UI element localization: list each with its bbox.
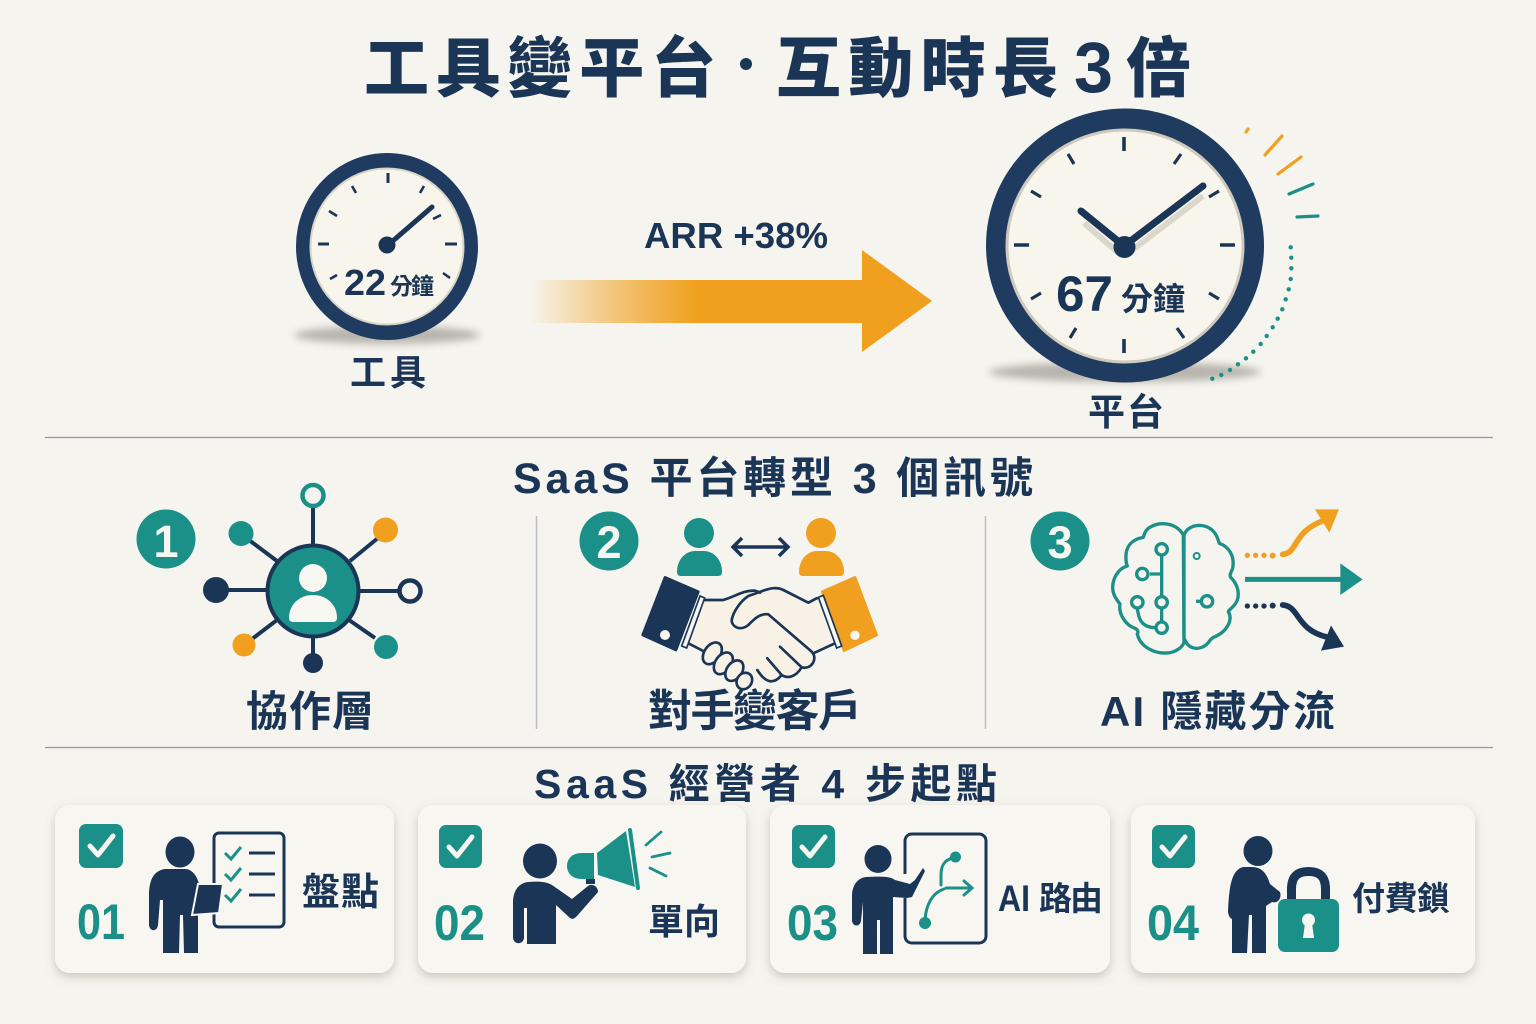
number 03: 03 <box>787 895 838 951</box>
icon: network hub <box>203 485 420 673</box>
arrow: growth <box>530 250 932 352</box>
icon: checklist <box>214 833 284 927</box>
icon: person <box>1228 836 1281 953</box>
icon: brain circuit <box>1113 524 1238 653</box>
heading: signals: SaaS 平台轉型 3 個訊號 <box>513 455 1033 503</box>
panel: signal 1 collaboration layer <box>136 485 420 735</box>
value: 22 minutes: 分鐘 <box>390 273 434 299</box>
value: 67 minutes <box>1056 266 1185 322</box>
badge 2 <box>580 512 638 570</box>
badge 2: 2 <box>596 517 622 568</box>
clock: tool 22 minutes <box>294 153 480 344</box>
number 02: 02 <box>434 895 485 951</box>
label: AI routing <box>998 878 1103 919</box>
label: paywall: 付費鎖 <box>1352 880 1450 917</box>
label: tool: 工具 <box>350 352 426 393</box>
card: step 02 one-way <box>418 805 746 973</box>
badge 1: 1 <box>153 516 179 567</box>
card: step 04 paywall <box>1131 805 1475 973</box>
label: rival becomes customer: 對手變客戶 <box>648 687 862 736</box>
checkbox <box>792 825 835 868</box>
icon: person pointing <box>852 845 925 954</box>
icon: handshake <box>643 577 877 692</box>
label: collaboration layer: 協作層 <box>246 688 374 735</box>
number 04: 04 <box>1147 895 1199 951</box>
icon: routing board <box>905 834 986 943</box>
title: 互動時長 <box>776 32 1058 105</box>
checkbox <box>1152 825 1195 868</box>
icon: padlock <box>1278 872 1339 952</box>
checkbox <box>79 824 123 868</box>
checkbox <box>439 825 482 868</box>
label: one-way: 單向 <box>648 901 720 942</box>
label: inventory: 盤點 <box>302 872 379 914</box>
badge 3 <box>1030 512 1090 570</box>
number 01: 01 <box>77 894 125 950</box>
badge 3: 3 <box>1047 517 1073 568</box>
heading: four steps: SaaS 經營者 4 步起點 <box>534 761 997 807</box>
title <box>364 29 1191 108</box>
growth label: ARR +38% <box>644 215 828 256</box>
value: 22 minutes <box>344 262 434 303</box>
icon: three routing arrows <box>1245 509 1363 651</box>
clock: platform 67 minutes <box>986 108 1264 382</box>
label: AI routing: AI <box>998 878 1030 919</box>
icon: two people with arrow <box>677 518 844 576</box>
panel: signal 2 rival becomes customer <box>580 512 877 736</box>
icon: person with tablet <box>149 836 223 953</box>
motion rays <box>1246 129 1318 217</box>
dotted progress arc <box>1210 245 1294 381</box>
label: AI routing: 路由 <box>1039 880 1103 917</box>
label: platform: 平台 <box>1088 392 1164 433</box>
card: step 03 AI routing <box>770 805 1110 973</box>
title: 倍 <box>1126 32 1191 105</box>
title: 工具變平台 <box>364 32 716 105</box>
label: AI hidden routing: AI 隱藏分流 <box>1100 688 1335 735</box>
title: 3 <box>1074 29 1113 108</box>
value: 67 minutes: 分鐘 <box>1121 281 1185 317</box>
panel: signal 3 AI hidden routing <box>1030 509 1363 735</box>
icon: person with megaphone <box>513 830 670 944</box>
value: 67 minutes: 67 <box>1056 266 1113 322</box>
card: step 01 inventory <box>55 805 394 973</box>
value: 22 minutes: 22 <box>344 262 386 303</box>
badge 1 <box>136 510 196 568</box>
